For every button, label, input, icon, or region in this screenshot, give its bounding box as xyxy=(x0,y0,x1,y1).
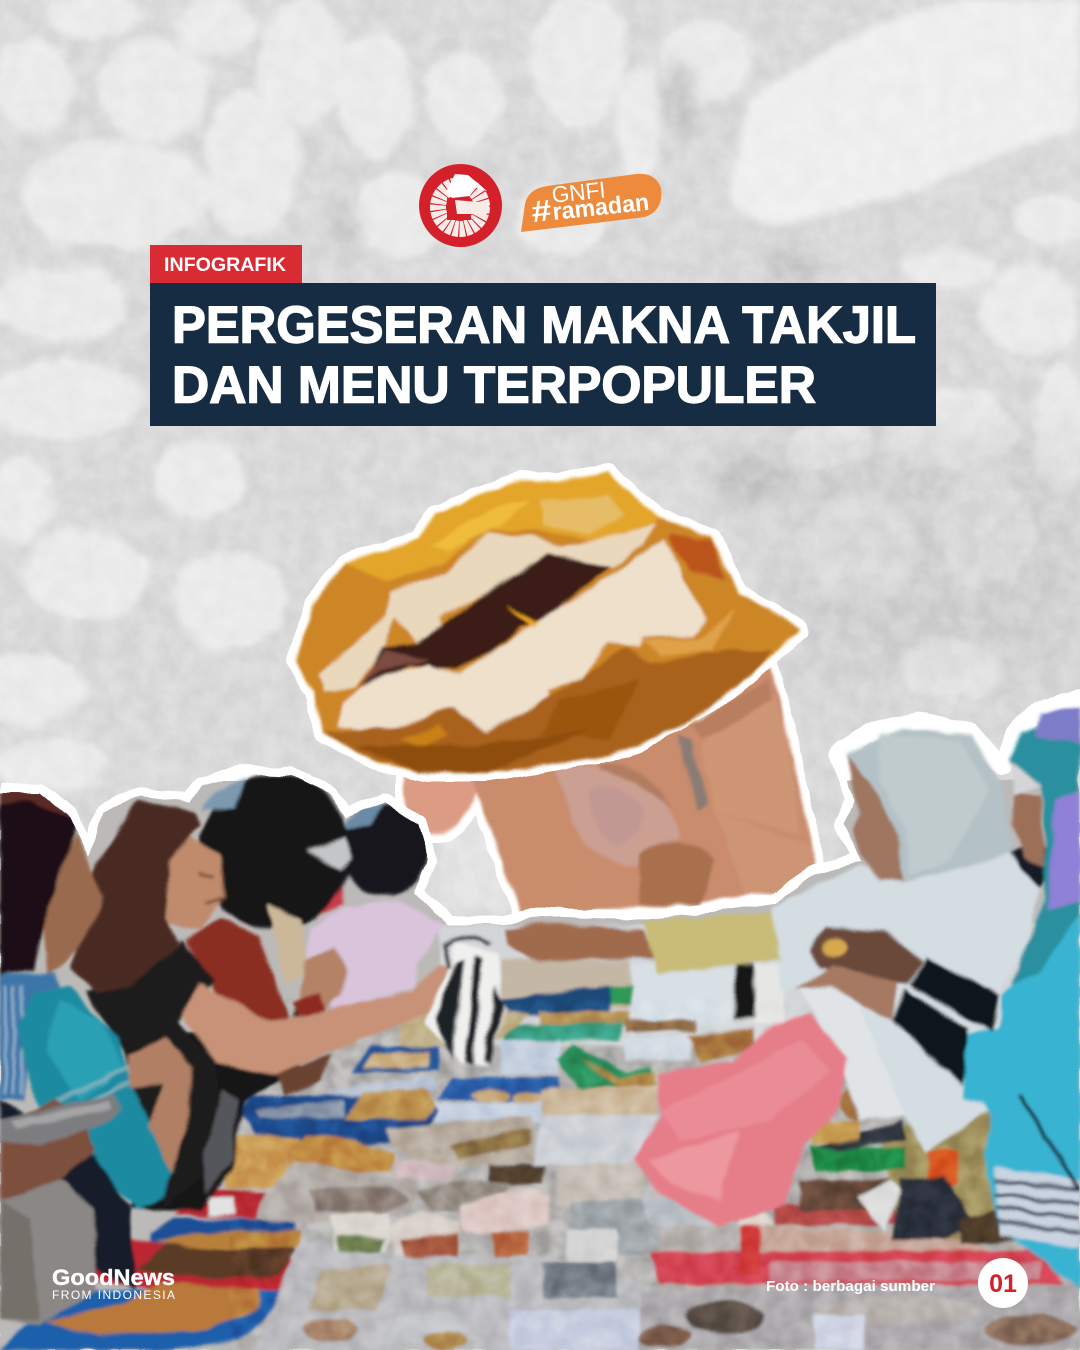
helmet riders xyxy=(342,804,428,896)
logo: GoodNews from Indonesia: GoodNews xyxy=(52,1265,175,1290)
woman 1 shirt xyxy=(0,972,60,1100)
top crust xyxy=(346,473,659,583)
green tray and bun xyxy=(809,1146,905,1172)
title panel xyxy=(150,283,936,426)
yellow sleeve and arm xyxy=(505,922,657,963)
centre containers xyxy=(533,1115,657,1165)
badge: #GNFIramadan xyxy=(521,172,661,232)
hands with phone xyxy=(0,1100,95,1200)
white cloak hijab seller xyxy=(771,853,1040,1152)
title panel: DAN MENU TERPOPULER xyxy=(172,356,816,414)
dark gap xyxy=(363,553,612,689)
right bottom xyxy=(658,1222,1074,1288)
cream lower layer xyxy=(339,540,708,733)
photo: takjil market stall with sellers and buyers xyxy=(0,698,1080,1350)
striped bag xyxy=(424,940,503,1066)
tag: INFOGRAFIK xyxy=(150,245,302,283)
woman 1 arm xyxy=(128,1037,193,1174)
woman 1 hair and face xyxy=(40,833,103,974)
woman 2 shirt, hair, face, arm xyxy=(86,940,225,1207)
page number badge xyxy=(978,1258,1028,1308)
buyer hijab and face xyxy=(1009,845,1048,889)
black sleeves xyxy=(911,957,999,1032)
hijab seller head xyxy=(845,729,1012,883)
logo: GoodNews from Indonesia: FROM INDONESIA xyxy=(52,1288,175,1302)
title panel: PERGESERAN MAKNA TAKJIL xyxy=(172,296,916,354)
pink plastic bag xyxy=(633,1013,847,1227)
dark bottom crust xyxy=(321,647,773,773)
table texture overlay xyxy=(230,1000,1080,1350)
logo: GNFI red circle emblem xyxy=(419,164,502,247)
gray cloth xyxy=(0,1180,95,1325)
background of stall xyxy=(440,925,1080,1045)
fried tofu xyxy=(295,473,801,773)
badge: #GNFIramadan: ramadan xyxy=(551,189,650,226)
page number badge: 01 xyxy=(989,1270,1017,1298)
hand xyxy=(404,667,818,913)
table base xyxy=(0,780,1080,1350)
logo: GoodNews from Indonesia xyxy=(52,1265,175,1302)
buyer hands xyxy=(809,928,923,986)
small plastic bags xyxy=(857,1182,900,1232)
left trays xyxy=(400,1005,530,1050)
photo: hand holding fried tofu xyxy=(295,473,818,913)
photo credit: Foto : berbagai sumber xyxy=(766,1278,935,1295)
tag: INFOGRAFIK: INFOGRAFIK xyxy=(164,255,286,276)
red tray, blue tray, plate xyxy=(175,1188,265,1220)
spring rolls and fried snacks xyxy=(226,1135,300,1188)
red-orange patch xyxy=(668,535,725,580)
crust speck xyxy=(505,606,540,627)
badge: #GNFIramadan: # xyxy=(530,194,553,229)
light blue jacket xyxy=(961,916,1080,1290)
bottom plastic mess xyxy=(255,1240,660,1350)
person in red dotted shirt xyxy=(186,918,290,1029)
foil package group xyxy=(250,1162,420,1225)
badge: #GNFIramadan: GNFI xyxy=(550,176,607,208)
ground, beige, orange, black bag xyxy=(881,1111,997,1240)
packages behind xyxy=(385,1115,535,1170)
cream upper layer xyxy=(321,523,656,693)
